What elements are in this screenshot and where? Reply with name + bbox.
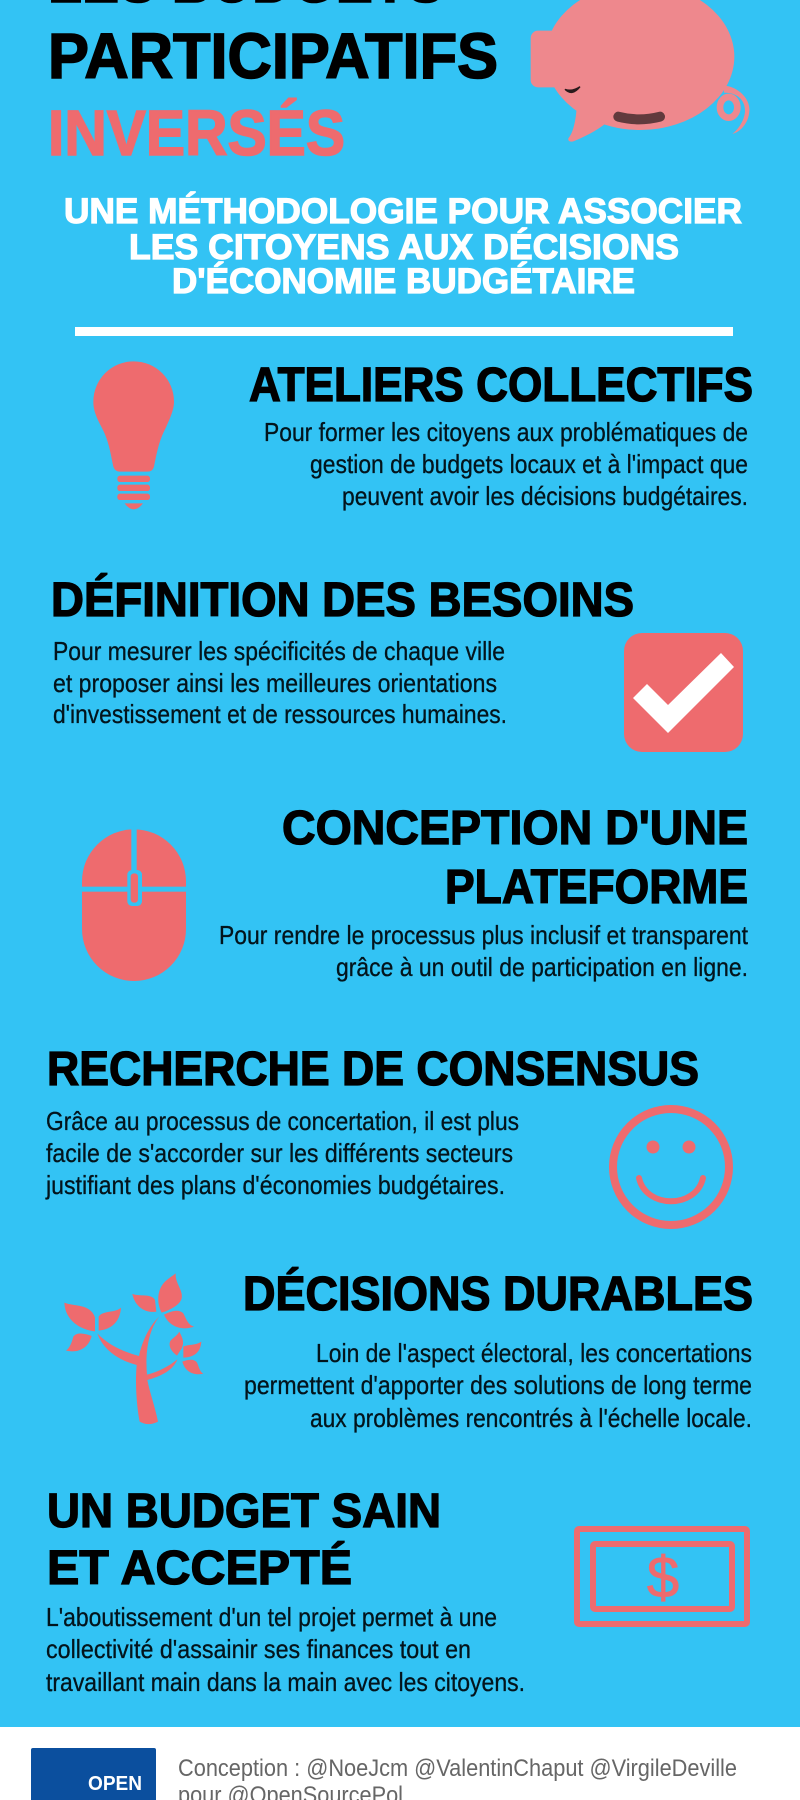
text block: définition des besoins — [53, 636, 507, 729]
text block: ateliers collectifs — [264, 417, 748, 511]
logo: open source politics: OPEN — [88, 1773, 142, 1795]
heading: un budget sain et accepté: ET ACCEPTÉ — [47, 1541, 352, 1595]
text block: décisions durables — [244, 1338, 752, 1433]
text block: ateliers collectifs: Pour former les citoyens aux problématiques de — [264, 417, 748, 447]
title: INVERSÉS — [48, 97, 345, 169]
heading: un budget sain et accepté — [47, 1485, 441, 1595]
subtitle: D'ÉCONOMIE BUDGÉTAIRE — [172, 261, 635, 301]
text block: définition des besoins: d'investissement et de ressources humaines. — [53, 699, 507, 729]
text block: décisions durables: aux problèmes rencontrés à l'échelle locale. — [310, 1403, 752, 1433]
text block: recherche de consensus: justifiant des plans d'économies budgétaires. — [45, 1170, 505, 1200]
heading: décisions durables: DÉCISIONS DURABLES — [243, 1267, 753, 1321]
heading: recherche de consensus: RECHERCHE DE CONSENSUS — [47, 1043, 699, 1096]
panel: décisions durables — [64, 1267, 753, 1433]
text block: recherche de consensus: facile de s'accorder sur les différents secteurs — [46, 1138, 513, 1168]
text block: définition des besoins: et proposer ainsi les meilleures orientations — [53, 668, 497, 698]
icon: check box — [624, 633, 743, 752]
text block: conception d'une plateforme — [219, 920, 749, 982]
text block: recherche de consensus: Grâce au processus de concertation, il est plus — [46, 1106, 519, 1136]
text block: ateliers collectifs: peuvent avoir les décisions budgétaires. — [342, 481, 748, 511]
text block: un budget sain et accepté — [46, 1602, 525, 1697]
credits: Conception : @NoeJcm @ValentinChaput @VirgileDeville — [178, 1755, 737, 1782]
panel: ateliers collectifs — [93, 359, 753, 511]
credits — [178, 1755, 737, 1800]
heading: conception d'une plateforme: CONCEPTION D'UNE — [282, 802, 748, 855]
panel: définition des besoins — [51, 573, 743, 752]
logo: open source politics — [31, 1748, 156, 1800]
icon: computer mouse — [80, 827, 188, 981]
subtitle — [64, 191, 742, 301]
subtitle: LES CITOYENS AUX DÉCISIONS — [129, 227, 679, 267]
title — [48, 0, 498, 169]
heading: un budget sain et accepté: UN BUDGET SAIN — [47, 1485, 441, 1538]
panel: recherche de consensus — [45, 1043, 729, 1225]
heading: conception d'une plateforme: PLATEFORME — [445, 861, 748, 914]
subtitle: UNE MÉTHODOLOGIE POUR ASSOCIER — [64, 191, 742, 231]
icon: light bulb — [93, 361, 174, 509]
icon: banknote — [577, 1529, 747, 1624]
icon: piggy bank — [531, 0, 749, 142]
text block: un budget sain et accepté: travaillant main dans la main avec les citoyens. — [46, 1667, 525, 1697]
panel: conception d'une plateforme — [80, 802, 749, 982]
text block: décisions durables: permettent d'apporter des solutions de long terme — [244, 1370, 752, 1400]
text block: décisions durables: Loin de l'aspect électoral, les concertations — [316, 1338, 752, 1368]
heading: définition des besoins: DÉFINITION DES BESOINS — [51, 573, 634, 627]
icon: banknote: $ — [647, 1545, 679, 1610]
heading: ateliers collectifs: ATELIERS COLLECTIFS — [249, 359, 753, 412]
text block: un budget sain et accepté: collectivité d'assainir ses finances tout en — [46, 1634, 471, 1664]
text block: un budget sain et accepté: L'aboutissement d'un tel projet permet à une — [46, 1602, 497, 1632]
text block: ateliers collectifs: gestion de budgets locaux et à l'impact que — [310, 449, 748, 479]
icon: tree — [64, 1273, 203, 1424]
title: PARTICIPATIFS — [48, 20, 498, 92]
heading: conception d'une plateforme — [282, 802, 748, 914]
text block: définition des besoins: Pour mesurer les spécificités de chaque ville — [53, 636, 505, 666]
text block: conception d'une plateforme: grâce à un outil de participation en ligne. — [336, 952, 748, 982]
text block: recherche de consensus — [45, 1106, 519, 1200]
footer — [0, 1727, 800, 1800]
panel: un budget sain et accepté — [46, 1485, 747, 1697]
icon: smiley — [613, 1109, 729, 1225]
